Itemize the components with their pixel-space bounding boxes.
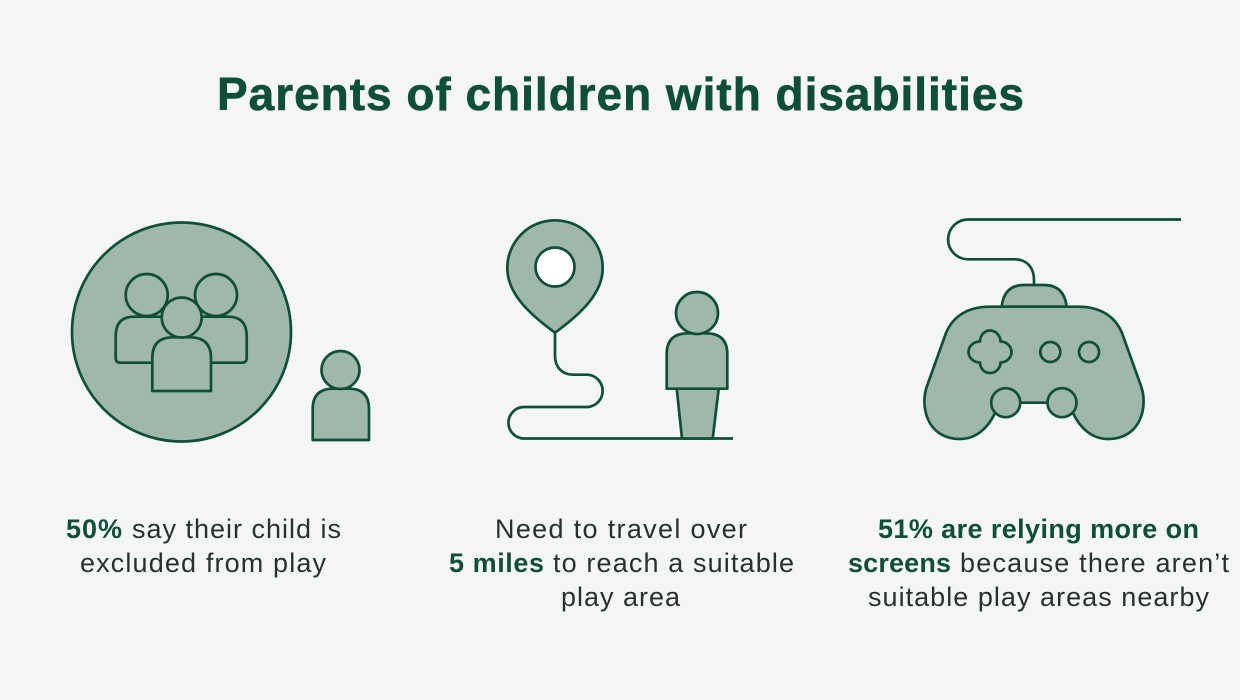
icon: group in circle with child outside bbox=[72, 222, 369, 442]
text: 51% screens: because there aren’t bbox=[960, 548, 1229, 578]
text: 51% screens: screens bbox=[848, 548, 951, 578]
text: 5 miles: play area bbox=[561, 582, 681, 612]
panel: travel distance bbox=[449, 220, 794, 612]
panel: excluded from play bbox=[66, 222, 369, 578]
text: 50% excluded: excluded from play bbox=[80, 548, 326, 578]
text: 51% screens bbox=[848, 514, 1229, 612]
text: 50% excluded: say their child is bbox=[132, 514, 341, 544]
text: 5 miles: 5 miles bbox=[449, 548, 544, 578]
icon: map pin, route and person bbox=[507, 220, 733, 438]
text: 5 miles bbox=[449, 514, 794, 612]
text: 50% excluded: 50% bbox=[66, 514, 122, 544]
icon: game controller with cable bbox=[924, 219, 1181, 439]
text: 51% screens: 51% are relying more on bbox=[878, 514, 1199, 544]
text: 50% excluded bbox=[66, 514, 341, 578]
text: 5 miles: to reach a suitable bbox=[553, 548, 794, 578]
panel: screens bbox=[848, 219, 1229, 612]
text: 5 miles: Need to travel over bbox=[495, 514, 747, 544]
title: Parents of children with disabilities bbox=[217, 68, 1024, 120]
text: 51% screens: suitable play areas nearby bbox=[868, 582, 1210, 612]
